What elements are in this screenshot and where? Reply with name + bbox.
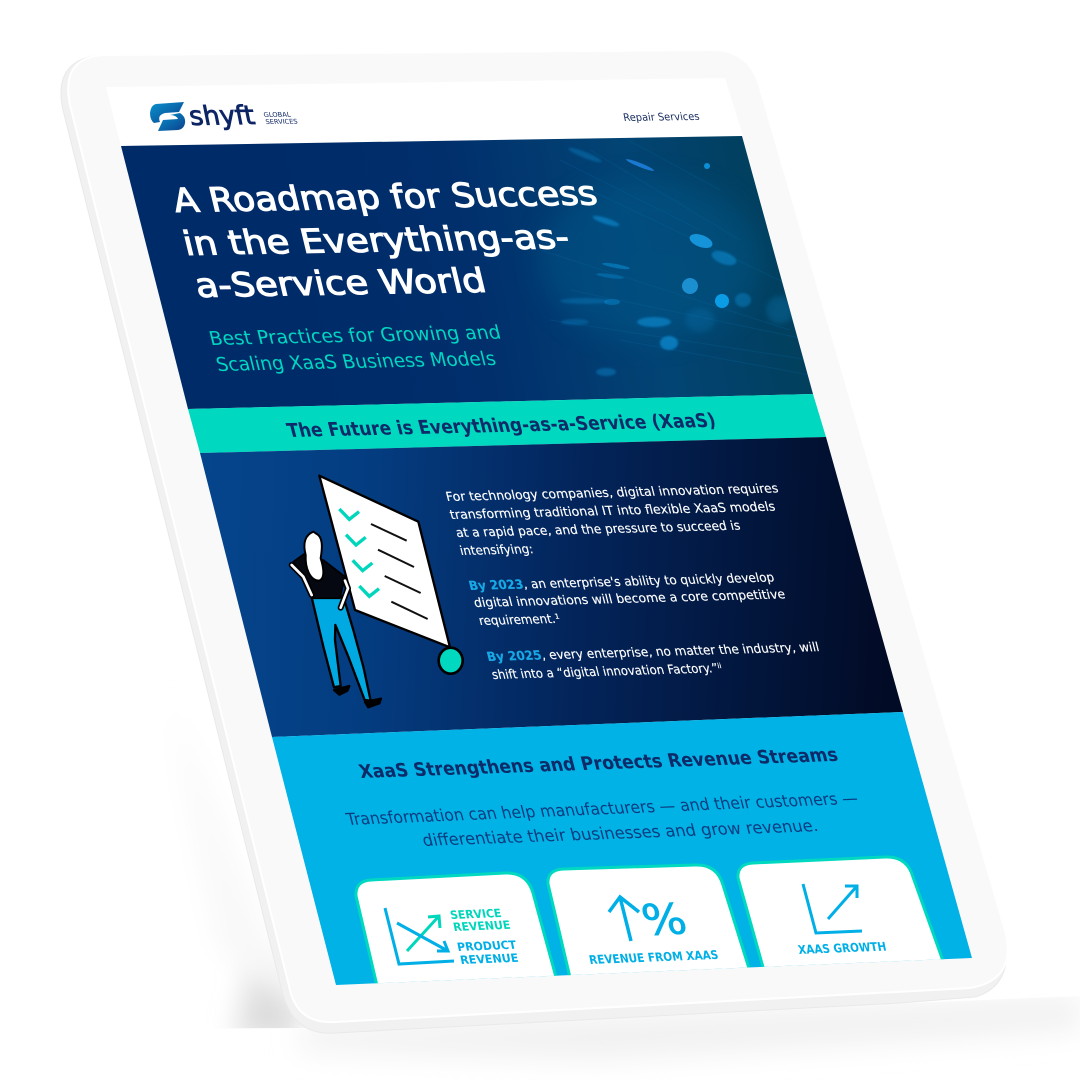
checklist sheet [319, 476, 450, 647]
section band: future heading [188, 394, 826, 453]
card: revenue from XaaS [546, 864, 750, 976]
stat: by 2025: shift into a “digital innovation Factory.”ⁱⁱ [490, 660, 724, 682]
xaas growth label: XAAS GROWTH [797, 940, 888, 957]
nav label: Repair Services [622, 111, 701, 124]
revenue intro text [343, 788, 860, 850]
card: service vs product revenue [354, 872, 558, 984]
screen header band [106, 78, 743, 146]
product revenue label: PRODUCT [456, 938, 518, 954]
tablet body [61, 50, 1008, 1033]
stat: by 2023 [467, 570, 787, 628]
service revenue label [450, 908, 510, 931]
check marks [339, 509, 379, 596]
intro paragraph: For technology companies, digital innovation requires [444, 481, 780, 504]
logo wordmark: shyft [186, 101, 257, 132]
icon: up arrow and percent: % [637, 896, 691, 946]
hero subtitle: Best Practices for Growing and [207, 321, 503, 350]
tablet shadow [170, 700, 1080, 1060]
intro paragraph: intensifying: [458, 541, 535, 558]
logo icon [150, 102, 185, 131]
person [292, 532, 381, 707]
stat: by 2023: requirement.¹ [477, 611, 562, 628]
icon: up arrow and percent [608, 894, 686, 942]
intro paragraph [444, 481, 780, 558]
panel: revenue streams [272, 712, 972, 985]
hero subtitle [207, 321, 503, 376]
logo tagline: SERVICES [265, 118, 298, 126]
revenue from xaas label: REVENUE FROM XAAS [588, 948, 720, 967]
list lines [371, 524, 428, 619]
panel: future intro [200, 437, 903, 737]
revenue intro text: differentiate their businesses and grow revenue. [420, 815, 820, 850]
hero title: A Roadmap for Success [169, 174, 601, 220]
fibre optic light texture [540, 130, 810, 376]
hero panel [121, 130, 813, 409]
logo tagline [263, 111, 298, 126]
icon: growth chart [803, 884, 862, 933]
illustration: person reading checklist [292, 476, 463, 707]
hero title: a-Service World [191, 261, 490, 305]
logo tagline: GLOBAL [263, 111, 292, 119]
tablet front face [68, 50, 1008, 1022]
product revenue label: REVENUE [459, 951, 520, 967]
intro paragraph: transforming traditional IT into flexible XaaS models [448, 499, 777, 522]
intro paragraph: at a rapid pace, and the pressure to succeed is [454, 518, 742, 540]
revenue heading: XaaS Strengthens and Protects Revenue Streams [357, 745, 840, 783]
stat: by 2023: digital innovations will become a core competitive [472, 586, 787, 610]
card: XaaS growth [736, 856, 944, 967]
section band: future heading: The Future is Everything-as-a-Service (XaaS) [284, 409, 718, 442]
service revenue label: REVENUE [452, 918, 512, 934]
revenue intro text: Transformation can help manufacturers — and their customers — [343, 788, 860, 829]
stat: by 2025 [485, 639, 821, 682]
service revenue label: SERVICE [449, 906, 503, 922]
product revenue label [457, 940, 518, 964]
sheet pointer dot [439, 648, 463, 674]
hero subtitle: Scaling XaaS Business Models [214, 347, 498, 376]
stat: by 2023: By 2023, an enterprise's ability to quickly develop [467, 570, 776, 593]
tablet side edge [61, 53, 1007, 1033]
icon: crossing revenue arrows [385, 908, 454, 964]
hero title [169, 174, 601, 305]
stat: by 2025: By 2025, every enterprise, no matter the industry, will [485, 639, 821, 664]
hero title: in the Everything-as- [179, 218, 573, 263]
